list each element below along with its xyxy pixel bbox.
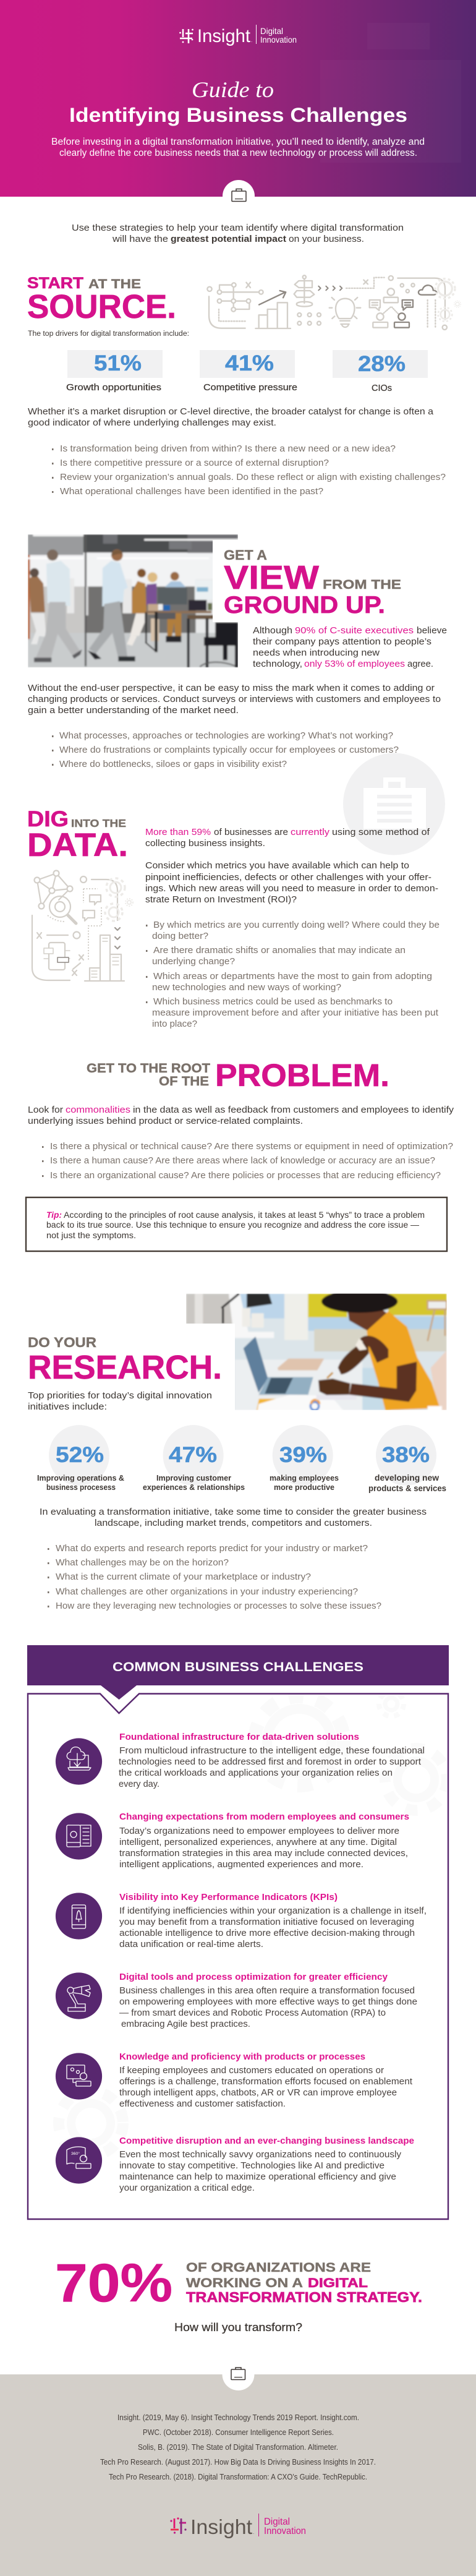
body text: C-suite stat: only 53% of employees: [304, 659, 405, 669]
challenge: employee and consumer expectations: transformation strategies in this area may include connected devices,: [119, 1848, 408, 1859]
stat: 47% customer experiences: [143, 1425, 245, 1492]
body text: C-suite stat: believe: [417, 625, 447, 636]
body text: data insights: currently: [291, 827, 330, 837]
photo: woman writing at laptop: [186, 1290, 447, 1411]
icon: robot arm: [67, 1985, 90, 2011]
woman in tan coat: [127, 614, 145, 646]
heading: dig into the data: DIG: [27, 807, 69, 831]
body text: C-suite stat: 90% of C-suite executives: [295, 625, 414, 636]
challenge: foundational infrastructure: From multicloud infrastructure to the intelligent edge, these foundational: [119, 1745, 425, 1756]
challenge: knowledge and proficiency: offerings is a challenge, transformation efforts focused on enablement: [119, 2076, 413, 2087]
heading: get to the root of the problem: [87, 1058, 389, 1093]
body text: C-suite stat: technology,: [253, 659, 302, 669]
heading: start at the source: SOURCE.: [27, 288, 176, 325]
challenge: digital tools and process optimization: — from smart devices and Robotic Process Automation (RPA) to: [119, 2008, 386, 2018]
woman: [347, 1309, 388, 1331]
stat callout: 70% of organizations: OF ORGANIZATIONS ARE: [186, 2261, 371, 2275]
bullet list: research questions: How are they leveraging new technologies or processes to solve these issues?: [56, 1601, 381, 1611]
challenge: foundational infrastructure: Foundational infrastructure for data-driven solutions: [119, 1732, 359, 1742]
bullet list: data questions: Are there dramatic shifts or anomalies that may indicate an: [153, 945, 406, 956]
challenge: competitive disruption: Competitive disruption and an ever-changing business landscape: [119, 2136, 414, 2146]
body text: commonalities: Look for: [28, 1105, 63, 1115]
challenge: employee and consumer expectations: [56, 1812, 409, 1870]
body text: C-suite stat: needs when introducing new: [253, 648, 380, 658]
challenge: KPI visibility: you may benefit from a transformation initiative focused on leveraging: [119, 1917, 414, 1927]
intro text: Before investing in a digital transformation initiative, you’ll need to identify, analyze and: [51, 137, 425, 147]
stat: 39% productive employees: 39%: [279, 1443, 327, 1467]
stat: 38% new products: [368, 1425, 446, 1493]
logo: Insight Digital Innovation: .: [253, 2530, 254, 2535]
text: top drivers: The top drivers for digital transformation include:: [28, 330, 189, 338]
stat: 28% CIOs: [333, 350, 428, 393]
stat: 52% operations and processes: business procesess: [46, 1483, 116, 1492]
stat callout: 70% of organizations: TRANSFORMATION STRATEGY.: [186, 2289, 422, 2305]
bullet list: data questions: underlying change?: [152, 956, 235, 967]
frame: [28, 1693, 448, 2219]
lead-in text: Use these strategies to help your team identify where digital transformation: [72, 223, 404, 233]
banner heading: [27, 1645, 449, 1700]
body text: catalyst: Whether it’s a market disruption or C-level directive, the broader catalyst for change is often a: [28, 406, 434, 417]
heading: get to the root of the problem: OF THE: [159, 1074, 209, 1089]
challenge: employee and consumer expectations: intelligent, personalized experiences, anywhere at any time. Digital: [119, 1837, 397, 1847]
title: Guide to: [192, 77, 274, 102]
banner heading: COMMON BUSINESS CHALLENGES: [113, 1660, 363, 1674]
watermark: suitcase: [320, 23, 461, 163]
logo: Insight Digital Innovation: [170, 2514, 306, 2538]
callout: root cause tip: back to its true source. Use this technique to ensure you recognize and address the core issue —: [46, 1220, 419, 1230]
heading: start at the source: START: [27, 275, 83, 292]
heading: get to the root of the problem: GET TO THE ROOT: [87, 1061, 210, 1076]
references: Tech Pro Research. (August 2017). How Big Data Is Driving Business Insights In 2017.: [100, 2458, 376, 2467]
challenge: competitive disruption: innovate to stay competitive. Technologies like AI and predictive: [119, 2160, 385, 2171]
bullet list: source questions: Review your organization’s annual goals. Do these reflect or align with existing challenges?: [60, 472, 446, 482]
body text: catalyst: [28, 406, 434, 428]
lead-in text: greatest potential impact: [171, 234, 286, 244]
challenge: digital tools and process optimization: [56, 1972, 417, 2029]
bullet list: data questions: into place?: [152, 1019, 197, 1029]
bullet list: data questions: Which areas or departments have the most to gain from adopting: [153, 971, 432, 982]
challenge: knowledge and proficiency: [56, 2052, 413, 2109]
stat: 52% operations and processes: 52%: [56, 1443, 104, 1467]
illustration: data analysis line art: [32, 871, 133, 981]
body text: top priorities: initiatives include:: [28, 1401, 107, 1412]
heading: get a view from the ground up: FROM THE: [323, 578, 401, 592]
challenge: KPI visibility: [56, 1892, 427, 1949]
title: Identifying Business Challenges: [69, 104, 407, 126]
challenge: knowledge and proficiency: effectiveness and customer satisfaction.: [119, 2099, 286, 2109]
bullet list: research questions: [48, 1543, 381, 1611]
whiteboard and flipboard: [195, 580, 213, 600]
bullet list: research questions: What challenges may be on the horizon?: [56, 1557, 229, 1568]
bullet list: ground-up questions: [52, 730, 399, 769]
bullet list: data questions: [146, 920, 440, 1029]
callout: root cause tip: Tip:: [46, 1210, 62, 1220]
bullet list: source questions: What operational challenges have been identified in the past?: [60, 486, 323, 497]
body text: data insights: pinpoint inefficiencies, defects or other challenges with your offer-: [145, 872, 431, 883]
challenge: knowledge and proficiency: Knowledge and proficiency with products or processes: [119, 2052, 365, 2062]
body text: data insights: using some method of: [332, 827, 430, 837]
stat: 38% new products: developing new: [375, 1473, 439, 1483]
body text: business landscape: landscape, including market trends, competitors and customers.: [95, 1518, 372, 1528]
stat callout: 70% of organizations: WORKING ON A: [186, 2276, 303, 2290]
heading: do your research: RESEARCH.: [28, 1349, 222, 1386]
challenge: competitive disruption: your organization a critical edge.: [119, 2183, 255, 2193]
stat callout: 70% of organizations: [55, 2253, 422, 2313]
closing question: How will you transform?: [174, 2321, 302, 2334]
body text: end-user perspective: gain a better understanding of the market need.: [28, 705, 239, 716]
body text: commonalities: [28, 1105, 454, 1126]
heading: get a view from the ground up: [224, 547, 401, 618]
heading: dig into the data: INTO THE: [71, 817, 126, 829]
references: Solis, B. (2019). The State of Digital Transformation. Altimeter.: [138, 2443, 338, 2452]
logo: Insight Digital Innovation: Digital: [260, 26, 283, 36]
logo: Insight Digital Innovation: Insight: [197, 26, 251, 46]
bullet list: research questions: What is the current climate of your marketplace or industry?: [56, 1572, 311, 1582]
stat: 39% productive employees: more productive: [274, 1483, 334, 1492]
heading: get to the root of the problem: PROBLEM.: [215, 1058, 389, 1093]
callout: root cause tip: According to the principles of root cause analysis, it takes at least 5 “whys” to trace a problem: [64, 1210, 425, 1220]
body text: end-user perspective: changing products or services. Conduct surveys or interviews with customers and employees to: [28, 694, 441, 704]
challenge: digital tools and process optimization: embracing Agile best practices.: [121, 2019, 250, 2029]
challenge: foundational infrastructure: [56, 1732, 425, 1789]
challenge: digital tools and process optimization: Digital tools and process optimization for greater efficiency: [119, 1972, 388, 1982]
stat: 51% growth opportunities: Growth opportunities: [66, 382, 161, 393]
challenge: KPI visibility: actionable intelligence to drive more effective decision-making through: [119, 1928, 415, 1938]
watermark: gears: [59, 1692, 447, 2155]
bullet list: ground-up questions: Where do frustrations or complaints typically occur for employees or customers?: [59, 745, 399, 755]
bullet list: data questions: By which metrics are you currently doing well? Where could they be: [153, 920, 440, 930]
stat: 39% productive employees: making employees: [270, 1473, 339, 1483]
challenge: foundational infrastructure: every day.: [119, 1779, 159, 1789]
challenge: foundational infrastructure: the critical workloads and applications your organization relies on: [119, 1768, 393, 1778]
challenge: digital tools and process optimization: on empowering employees with more effective ways to get things done: [119, 1996, 417, 2007]
heading: get a view from the ground up: GROUND UP.: [224, 592, 385, 618]
body text: top priorities: [28, 1390, 212, 1412]
logo: Insight Digital Innovation: Insight: [190, 2515, 252, 2538]
stat: 47% customer experiences: Improving customer: [156, 1473, 231, 1483]
challenge: competitive disruption: Even the most technically savvy organizations need to continuously: [119, 2149, 401, 2160]
stat: 52% operations and processes: Improving operations &: [37, 1473, 124, 1483]
body text: business landscape: [40, 1507, 427, 1528]
body text: data insights: Consider which metrics you have available which can help to: [145, 860, 409, 871]
monitor, laptop, desk: [158, 588, 187, 604]
lead-in text: will have the: [112, 234, 168, 244]
stat: 38% new products: products & services: [368, 1483, 446, 1493]
stat: 28% CIOs: 28%: [358, 352, 406, 376]
body text: commonalities: in the data as well as feedback from customers and employees to identify: [133, 1105, 454, 1115]
stat: 47% customer experiences: 47%: [169, 1443, 217, 1467]
body text: data insights: More than 59%: [145, 827, 211, 837]
stat: 39% productive employees: [270, 1425, 339, 1492]
logo: Insight Digital Innovation: Digital: [264, 2517, 290, 2527]
blonde woman: [147, 583, 156, 605]
body text: C-suite stat: their company pays attention to people’s: [253, 636, 431, 647]
bullet list: root cause questions: Is there an organizational cause? Are there policies or processes that are reducing efficiency?: [50, 1170, 441, 1181]
icon: cloud and laptop: [67, 1747, 91, 1770]
stat: 28% CIOs: CIOs: [372, 383, 392, 393]
body text: data insights: ings. Which new areas will you need to measure in order to demon-: [145, 883, 438, 894]
body text: catalyst: good indicator of where underlying challenges may exist.: [28, 417, 276, 428]
walking man: [102, 561, 128, 607]
challenge: digital tools and process optimization: Business challenges in this area often require a transformation focused: [119, 1985, 415, 1996]
glass reflection figure: [29, 573, 45, 612]
stat: 51% growth opportunities: [66, 350, 163, 393]
heading: dig into the data: [27, 807, 128, 863]
logo: Insight Digital Innovation: [179, 25, 297, 46]
lead-in text: [72, 223, 404, 244]
callout: root cause tip: not just the symptoms.: [46, 1230, 136, 1240]
challenge: employee and consumer expectations: intelligent applications, augmented experiences and more.: [119, 1859, 363, 1870]
stat callout: 70% of organizations: DIGITAL: [308, 2276, 368, 2290]
challenge: competitive disruption: maintenance can help to maximize operational efficiency and give: [119, 2172, 396, 2182]
challenge: KPI visibility: If identifying inefficiencies within your organization is a challenge in itself,: [119, 1906, 427, 1916]
stat: 51% growth opportunities: 51%: [94, 351, 142, 375]
bullet list: research questions: What do experts and research reports predict for your industry or market?: [56, 1543, 368, 1554]
foreground desk and chair: [187, 614, 213, 620]
stat: 41% competitive pressure: [200, 350, 297, 393]
intro text: [51, 137, 425, 158]
bullet list: root cause questions: [42, 1141, 453, 1181]
references: Tech Pro Research. (2018). Digital Transformation: A CXO’s Guide. TechRepublic.: [109, 2473, 367, 2481]
body text: commonalities: underlying issues behind product or service-related complaints.: [28, 1116, 303, 1126]
bullet list: root cause questions: Is there a human cause? Are there areas where lack of knowledge or accuracy are an issue?: [50, 1155, 435, 1166]
bullet list: ground-up questions: Where do bottlenecks, siloes or gaps in visibility exist?: [59, 759, 287, 769]
watermark: suitcase circle: [343, 753, 445, 855]
logo: Insight Digital Innovation: .: [251, 38, 252, 43]
title: [69, 77, 407, 126]
stat: 41% competitive pressure: 41%: [225, 351, 274, 375]
bullet list: root cause questions: Is there a physical or technical cause? Are there systems or equipment in need of optimization?: [50, 1141, 453, 1152]
bullet list: research questions: What challenges are other organizations in your industry experiencing?: [56, 1586, 358, 1597]
references: PWC. (October 2018). Consumer Intelligence Report Series.: [143, 2428, 334, 2437]
challenge: KPI visibility: data unification or real-time alerts.: [119, 1939, 263, 1949]
body text: C-suite stat: agree.: [407, 659, 433, 669]
logo: Insight Digital Innovation: Innovation: [260, 35, 297, 45]
icon: phone with bell: [72, 1905, 85, 1928]
body text: data insights: [145, 827, 438, 905]
panel: common business challenges: [27, 1645, 449, 2219]
challenge: KPI visibility: Visibility into Key Performance Indicators (KPIs): [119, 1892, 338, 1902]
bullet list: source questions: [52, 443, 446, 497]
heading: dig into the data: DATA.: [27, 827, 128, 863]
icon: 360 view and person: [67, 2147, 91, 2168]
intro text: clearly define the core business needs that a new technology or process will address.: [59, 148, 417, 158]
body text: C-suite stat: [253, 625, 447, 669]
challenge: competitive disruption: [56, 2136, 414, 2193]
illustration: strategy line art: [207, 275, 461, 330]
callout: root cause tip: [26, 1197, 447, 1251]
challenge: foundational infrastructure: technologies need to be addressed first and foremost in order to support: [119, 1757, 422, 1767]
references: Insight. (2019, May 6). Insight Technology Trends 2019 Report. Insight.com.: [117, 2413, 359, 2422]
heading: get a view from the ground up: VIEW: [224, 559, 319, 596]
challenge: competitive disruption: 360°: [71, 2152, 80, 2156]
body text: business landscape: In evaluating a transformation initiative, take some time to consider the greater business: [40, 1507, 427, 1517]
body text: end-user perspective: [28, 683, 441, 716]
bullet list: source questions: Is transformation being driven from within? Is there a new need or a new idea?: [60, 443, 396, 454]
bullet list: data questions: Which business metrics could be used as benchmarks to: [153, 996, 393, 1007]
photo: office team walking: [28, 534, 239, 667]
heading: get a view from the ground up: GET A: [224, 547, 267, 563]
references: [100, 2413, 376, 2481]
icon: monitor and person: [67, 2065, 91, 2086]
body text: data insights: of businesses are: [214, 827, 288, 837]
body text: top priorities: Top priorities for today’s digital innovation: [28, 1390, 212, 1401]
body text: data insights: strate Return on Investment (ROI)?: [145, 894, 297, 905]
challenge: knowledge and proficiency: through intelligent apps, chatbots, AR or VR can improve employee: [119, 2087, 397, 2098]
body text: commonalities: commonalities: [66, 1105, 130, 1115]
man with beard: [165, 581, 186, 587]
body text: end-user perspective: Without the end-user perspective, it can be easy to miss the mark when it comes to adding or: [28, 683, 435, 693]
stat: 52% operations and processes: [37, 1425, 124, 1492]
stat: 38% new products: 38%: [382, 1443, 430, 1467]
icon: suitcase notch: [223, 2358, 255, 2390]
challenge: employee and consumer expectations: Changing expectations from modern employees and consumers: [119, 1812, 409, 1822]
challenge: employee and consumer expectations: Today’s organizations need to empower employees to deliver more: [119, 1826, 399, 1836]
challenge: knowledge and proficiency: If keeping employees and customers educated on operations or: [119, 2065, 384, 2076]
icon: phone and document: [67, 1825, 91, 1847]
bullet list: data questions: doing better?: [152, 931, 208, 941]
body text: data insights: collecting business insights.: [145, 838, 265, 849]
icon: suitcase notch: [223, 180, 255, 212]
bullet list: data questions: measure improvement before and after your initiative has been put: [152, 1008, 439, 1018]
lead-in text: on your business.: [289, 234, 364, 244]
bullet list: ground-up questions: What processes, approaches or technologies are working? What’s not working?: [59, 730, 393, 741]
footer: [0, 2358, 476, 2576]
heading: start at the source: AT THE: [88, 277, 141, 291]
stat callout: 70% of organizations: 70%: [55, 2253, 172, 2313]
heading: do your research: DO YOUR: [28, 1335, 96, 1350]
logo: Insight Digital Innovation: Innovation: [264, 2526, 306, 2536]
stat: 47% customer experiences: experiences & relationships: [143, 1483, 245, 1492]
header banner: [0, 0, 476, 197]
body text: C-suite stat: Although: [253, 625, 292, 636]
stat: 41% competitive pressure: Competitive pressure: [203, 382, 297, 393]
bullet list: source questions: Is there competitive pressure or a source of external disruption?: [60, 458, 329, 468]
bullet list: data questions: new technologies and new ways of working?: [152, 982, 341, 993]
